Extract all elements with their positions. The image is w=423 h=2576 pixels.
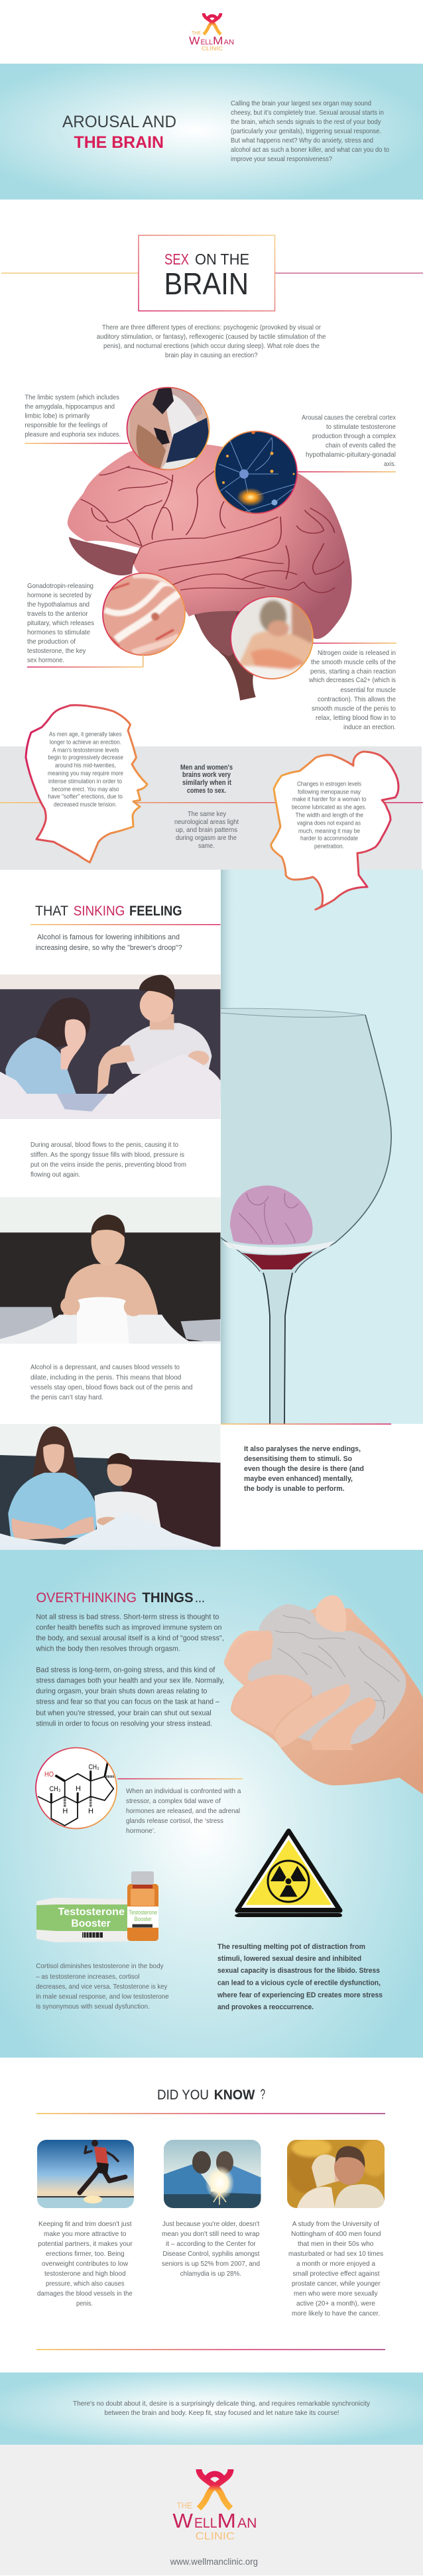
text: limbic system: the amygdala, hippocampus and	[25, 403, 115, 411]
text: three types of erections	[97, 323, 326, 359]
section heading: sex on the brain: SEX	[164, 251, 189, 268]
text: men age: decreased muscle tension.	[54, 801, 117, 809]
text: estrogen: vagina does not expand as	[297, 820, 361, 827]
section heading: sex on the brain: BRAIN	[164, 266, 249, 301]
text: men and women's brains	[180, 764, 233, 795]
text: nottingham study: small protective effect against	[293, 2270, 380, 2278]
text: during arousal: put on the veins inside the penis, preventing blood from	[30, 1161, 186, 1169]
text: same neurological areas: neurological areas light	[174, 818, 239, 826]
text: stressor: When an individual is confronted with a	[126, 1787, 241, 1795]
text: just because: mean you don't still need to wrap	[162, 2230, 260, 2238]
text: men and women's brains: Men and women's	[180, 764, 233, 772]
text: men age: begin to progressively decrease	[48, 754, 123, 762]
logo wordmark: CLINIC	[202, 46, 223, 52]
text: estrogen: much, meaning it may be	[298, 828, 360, 835]
text: gonadotropin: hormone is secreted by	[27, 591, 92, 599]
text: gonadotropin: Gonadotropin-releasing	[27, 582, 93, 590]
bold text: melting pot: The resulting melting pot of distraction from	[217, 1943, 365, 1951]
text: good stress: confer health benefits such as improved immune system on	[36, 1623, 221, 1631]
text: gonadotropin: testosterone, the key	[27, 647, 86, 655]
illustration: testosterone booster box and bottle	[36, 1871, 158, 1942]
text: nottingham study: that men in their 50s who	[298, 2240, 374, 2248]
circle: cortisol molecule: CH₃	[89, 1763, 99, 1771]
bold text: melting pot: can lead to a vicious cycle of erectile dysfunction,	[217, 1979, 381, 1987]
heading: did you know	[36, 2087, 385, 2114]
intro text: Calling the brain your largest sex organ may sound	[231, 99, 371, 107]
text: men age: As men age, it generally takes	[49, 731, 122, 738]
text: estrogen: make it harder for a woman to	[292, 796, 366, 803]
heading: did you know: ?	[261, 2087, 265, 2102]
title	[62, 113, 176, 152]
text: alcohol is a depressant: Alcohol is a depressant, and causes blood vessels to	[30, 1364, 180, 1372]
text: men and women's brains: similarly when it	[182, 779, 231, 787]
text: closing message	[73, 2400, 371, 2417]
illustration: testosterone booster box and bottle: Booster	[135, 1916, 152, 1922]
text: bad stress: during orgasm, your brain shuts down areas relating to	[36, 1687, 207, 1695]
text: stressor: stressor, a complex tidal wave of	[126, 1797, 221, 1805]
text: arousal causes: Arousal causes the cerebral cortex	[302, 414, 396, 422]
website url: www.wellmanclinic.org	[170, 2556, 258, 2567]
text: cortisol diminishes: in male sexual response, and low testosterone	[36, 1993, 169, 2001]
icon: logo mark	[204, 13, 221, 34]
text: bad stress: stimuli in order to focus on resolving your stress instead.	[36, 1720, 212, 1727]
heading: did you know: KNOW	[214, 2087, 255, 2103]
circle photo: neurons	[215, 430, 297, 514]
text: nitrogen oxide: relax, letting blood flow in to	[316, 714, 396, 722]
illustration: hand squeezing brain	[224, 1595, 423, 1794]
circle: cortisol molecule: H	[88, 1808, 93, 1816]
logo wordmark: M	[213, 35, 223, 47]
text: stressor: glands release cortisol, the ‘stress	[126, 1817, 223, 1825]
text: keeping fit: penis.	[76, 2300, 93, 2308]
text: keeping fit: erections firmer, too. Being	[46, 2250, 125, 2258]
text: arousal causes: to stimulate testosterone	[326, 423, 396, 431]
text: good stress: which the body then resolves through orgasm.	[35, 1645, 180, 1653]
heading: overthinking things: THINGS	[142, 1590, 194, 1606]
text: estrogen: Changes in estrogen levels	[297, 781, 361, 788]
heading: overthinking things: ...	[195, 1590, 205, 1606]
bold text: paralyses nerve endings: the body is unable to perform.	[244, 1485, 345, 1493]
title: AROUSAL AND	[62, 113, 176, 131]
cerebellum	[69, 537, 139, 575]
illustration: testosterone booster box and bottle: Testosterone	[58, 1906, 125, 1918]
text: during arousal: stiffen. As the spongy tissue fills with blood, pressure is	[30, 1151, 184, 1159]
text: bad stress	[36, 1666, 224, 1727]
text: keeping fit: overweight contributes to low	[42, 2260, 128, 2268]
text: estrogen: penetration.	[314, 843, 344, 850]
text: cortisol diminishes	[36, 1962, 169, 2011]
heading: that sinking feeling	[30, 904, 220, 925]
text: nitrogen oxide: Nitrogen oxide is released in	[318, 649, 396, 657]
text: men age: around his mid-twenties,	[55, 762, 116, 770]
text: three types of erections: brain play in causing an erection?	[165, 351, 258, 359]
text: men age: meaning you may require more	[48, 770, 123, 778]
text: nitrogen oxide: induce an erection.	[343, 723, 396, 731]
bold text: paralyses nerve endings: It also paralyses the nerve endings,	[244, 1445, 361, 1453]
bold text: melting pot: sexual capacity is disastrous for the libido. Stress	[217, 1967, 380, 1975]
circle photo: tissue	[102, 573, 186, 656]
circle: cortisol molecule: H	[76, 1785, 81, 1793]
footer logo wordmark: W	[172, 2509, 194, 2532]
intro text: But what happens next? Why do anxiety, stress and	[231, 137, 373, 145]
text: nottingham study: men who were more sexually	[294, 2290, 378, 2298]
text: keeping fit: pressure, which also causes	[46, 2280, 125, 2288]
intro text: cheesy, but it’s completely true. Sexual arousal starts in	[231, 109, 384, 117]
section heading: sex on the brain: ON THE	[195, 251, 249, 268]
text: estrogen: become lubricated as she ages.	[292, 804, 366, 811]
text: arousal causes: production through a complex	[312, 432, 396, 440]
text: same neurological areas: same.	[198, 842, 215, 850]
bold text: melting pot: where fear of experiencing ED creates more stress	[217, 1991, 383, 1999]
bold text: paralyses nerve endings: maybe even enhanced) mentally,	[244, 1475, 353, 1483]
text: nottingham study: Nottingham of 400 men found	[291, 2230, 381, 2238]
text: estrogen: harder to accommodate	[300, 835, 358, 843]
logo wordmark: ELL	[200, 38, 213, 46]
logo wordmark	[189, 31, 234, 52]
text: nitrogen oxide	[308, 643, 396, 731]
circle: cortisol molecule: CH₃	[49, 1785, 61, 1793]
title: THE BRAIN	[74, 133, 164, 152]
text: arousal causes: chain of events called the	[326, 441, 396, 449]
text: alcohol intro: increasing desire, so why the "brewer's droop"?	[36, 944, 182, 952]
text: nitrogen oxide: smooth muscle of the penis to	[312, 705, 396, 713]
panel: grey band men and women	[0, 746, 423, 870]
panel: right column glass background	[221, 870, 423, 1424]
text: gonadotropin: the hypothalamus and	[27, 601, 90, 609]
text: limbic system: responsible for the feelings of	[25, 422, 107, 430]
text: nottingham study	[36, 2220, 385, 2350]
text: alcohol intro	[36, 933, 182, 952]
intro text: alcohol act as such a boner killer, and what can you do to	[231, 146, 389, 154]
footer logo wordmark: THE	[176, 2500, 192, 2510]
text: good stress: Not all stress is bad stress. Short-term stress is thought to	[36, 1613, 219, 1621]
text: just because: Disease Control, syphilis amongst	[162, 2250, 259, 2258]
text: men and women's brains: brains work very	[182, 771, 231, 779]
heading: overthinking things	[36, 1590, 205, 1606]
bold text: melting pot: and provokes a reoccurrence.	[217, 2003, 314, 2011]
text: stressor: hormone’.	[126, 1827, 156, 1835]
text: cortisol diminishes: is synonymous with sexual dysfunction.	[36, 2003, 150, 2011]
text: same neurological areas	[174, 810, 239, 850]
text: nottingham study: A study from the University of	[292, 2220, 379, 2228]
footer logo wordmark: AN	[237, 2516, 257, 2531]
text: three types of erections: auditory stimulation, or fantasy), reflexogenic (caused by tactile stimulation of the	[97, 333, 326, 341]
text: nitrogen oxide: contraction). This allows the	[318, 695, 396, 703]
intro text: improve your sexual responsiveness?	[231, 155, 332, 163]
text: nitrogen oxide: the smooth muscle cells of the	[311, 658, 396, 666]
text: just because: chlamydia is up 28%.	[180, 2270, 241, 2278]
text: cortisol diminishes: decreases, and vice versa. Testosterone is key	[36, 1983, 168, 1991]
text: three types of erections: penis), and nocturnal erections (which occur during sleep). What role does the	[103, 342, 320, 350]
text: nottingham study: prostate cancer, while younger	[292, 2280, 381, 2288]
text: during arousal: flowing out again.	[30, 1171, 80, 1179]
logo wordmark: AN	[224, 38, 234, 46]
text: limbic system	[25, 394, 128, 444]
intro text: the brain, which sends signals to the rest of your body	[231, 118, 381, 126]
text: good stress: the body, and sexual arousal itself is a kind of "good stress",	[36, 1634, 224, 1642]
photo: worried man in bed	[0, 1197, 220, 1344]
cerebrum	[68, 444, 352, 639]
text: during arousal: During arousal, blood flows to the penis, causing it to	[30, 1141, 178, 1149]
icon: female head outline	[271, 752, 398, 909]
text: limbic system: pleasure and euphoria sex induces.	[25, 431, 121, 439]
footer logo wordmark: ELL	[194, 2516, 217, 2531]
text: closing message: There's no doubt about it, desire is a surprisingly delicate thing, and requires remarkable synchronicity	[73, 2400, 371, 2408]
text: alcohol is a depressant: vessels stay open, blood flows back out of the penis and	[30, 1383, 193, 1391]
logo wordmark: W	[189, 35, 200, 47]
text: closing message: between the brain and body. Keep fit, stay focused and let nature take its course!	[105, 2409, 339, 2417]
text: just because: seniors is up 52% from 2007, and	[162, 2260, 260, 2268]
panel: overthinking band	[0, 1550, 423, 2058]
text: arousal causes: hypothalamic-pituitary-gonadal	[306, 451, 396, 459]
circle: cortisol molecule	[36, 1747, 243, 1828]
text: stressor	[126, 1787, 241, 1835]
text: limbic system: limbic lobe) is primarily	[25, 412, 90, 420]
text: stressor: hormones are released, and the adrenal	[126, 1807, 240, 1815]
text: nitrogen oxide: penis, starting a chain reaction	[310, 668, 396, 675]
text: estrogen: following menopause may	[298, 789, 361, 796]
text: gonadotropin: pituitary, which releases	[27, 619, 94, 627]
bold text: paralyses nerve endings: even though the desire is there (and	[244, 1465, 364, 1473]
icon: radiation warning triangle	[235, 1831, 342, 1917]
circle: cortisol molecule: HO	[44, 1771, 54, 1779]
footer logo wordmark: M	[217, 2509, 236, 2532]
text: men age	[48, 731, 123, 809]
text: nitrogen oxide: essential for muscle	[341, 686, 396, 694]
bold text: melting pot: stimuli, lowered sexual desire and inhibited	[217, 1955, 361, 1963]
panel: footer	[0, 2445, 423, 2575]
photo: couple looking under the covers	[0, 974, 221, 1119]
intro text: (particularly your genitals), triggering sexual response.	[231, 127, 381, 135]
text: keeping fit: damages the blood vessels in the	[37, 2290, 133, 2298]
heading: overthinking things: OVERTHINKING	[36, 1590, 137, 1606]
text: arousal causes	[298, 414, 396, 472]
illustration: testosterone booster box and bottle: Booster	[71, 1918, 111, 1930]
text: arousal causes: axis.	[384, 460, 396, 468]
text: nitrogen oxide: which decreases Ca2+ (which is	[308, 676, 396, 684]
text: keeping fit: testosterone and high blood	[44, 2270, 126, 2278]
text: three types of erections: There are three different types of erections: psychogenic (provoked by visual or	[102, 323, 321, 331]
bold text: paralyses nerve endings: desensitising them to stimuli. So	[244, 1455, 352, 1463]
text: bad stress: stress and fear so that you can focus on the task at hand –	[36, 1698, 220, 1706]
text: men age: A man's testosterone levels	[52, 747, 119, 754]
text: during arousal	[30, 1141, 186, 1179]
bold text: paralyses nerve endings	[221, 1424, 391, 1493]
text: good stress	[35, 1613, 224, 1653]
heading: that sinking feeling: FEELING	[129, 904, 182, 919]
text: gonadotropin: the production of	[27, 638, 76, 646]
text: limbic system: The limbic system (which includes	[25, 394, 119, 402]
logo: top	[189, 13, 234, 52]
text: just because: Just because you're older, doesn't	[162, 2220, 259, 2228]
text: alcohol is a depressant: the penis can’t stay hard.	[30, 1393, 103, 1401]
text: nottingham study: a month or more enjoyed a	[296, 2260, 375, 2268]
footer logo wordmark	[172, 2500, 257, 2542]
footer logo wordmark: CLINIC	[196, 2531, 235, 2542]
text: bad stress: Bad stress is long-term, on-going stress, and this kind of	[36, 1666, 215, 1674]
illustration: brain	[68, 444, 352, 701]
photo: runner at sunset	[37, 2140, 134, 2208]
intro text	[231, 99, 389, 163]
text: gonadotropin	[27, 582, 143, 668]
text: nottingham study: masturbated or had sex 10 times	[288, 2250, 383, 2258]
logo wordmark: THE	[192, 31, 201, 36]
text: men age: become erect. You may also	[52, 786, 119, 793]
photo: older couple at sunset	[164, 2140, 261, 2208]
text: alcohol intro: Alcohol is famous for lowering inhibitions and	[37, 933, 180, 941]
icon: footer logo mark	[199, 2469, 231, 2508]
text: just because	[162, 2220, 260, 2278]
text: nottingham study: more likely to have the cancer.	[292, 2310, 380, 2317]
text: gonadotropin: travels to the anterior	[27, 610, 88, 618]
icon: small brain in glass	[230, 1185, 313, 1245]
heading: that sinking feeling: THAT	[35, 904, 68, 919]
brain sulci	[81, 466, 344, 593]
brain stem	[194, 608, 280, 701]
heading: that sinking feeling: SINKING	[74, 904, 125, 919]
text: alcohol is a depressant: dilate, including in the penis. This means that blood	[30, 1374, 182, 1381]
circle: cortisol molecule: H	[62, 1808, 68, 1816]
text: bad stress: stress damages both your health and your sex life. Normally,	[36, 1676, 224, 1684]
text: keeping fit: make you more attractive to	[44, 2230, 127, 2238]
heading: did you know: DID YOU	[157, 2087, 209, 2103]
text: men age: have "softer" erections, due to	[48, 793, 123, 801]
photo: annoyed woman and man in bed	[0, 1424, 220, 1550]
bold text: melting pot	[217, 1943, 383, 2011]
text: keeping fit: Keeping fit and trim doesn't just	[38, 2220, 132, 2228]
circle photo: massage	[231, 597, 315, 679]
text: same neurological areas: during orgasm are the	[176, 834, 237, 842]
text: cortisol diminishes: Cortisol diminishes testosterone in the body	[36, 1962, 164, 1970]
section heading: sex on the brain	[1, 235, 423, 311]
text: bad stress: but when you’re stressed, your brain can shut out sexual	[36, 1709, 212, 1717]
panel: closing band	[0, 2372, 423, 2445]
text: estrogen: The width and length of the	[296, 812, 363, 819]
illustration: wine glass	[221, 1008, 391, 1424]
text: men age: intense stimulation in order to	[48, 778, 122, 786]
text: men age: longer to achieve an erection.	[50, 739, 121, 746]
text: same neurological areas: up, and brain patterns	[176, 826, 237, 834]
text: men and women's brains: comes to sex.	[187, 787, 226, 795]
panel: intro band	[0, 64, 423, 200]
text: just because: it – according to the Center for	[166, 2240, 256, 2248]
illustration: testosterone booster box and bottle: Testosterone	[129, 1909, 157, 1916]
text: alcohol is a depressant	[30, 1364, 193, 1401]
text: estrogen	[292, 781, 366, 850]
text: gonadotropin: sex hormone.	[27, 656, 64, 664]
text: cortisol diminishes: – as testosterone increases, cortisol	[36, 1973, 139, 1981]
circle photo: couple lingerie	[126, 387, 211, 472]
text: gonadotropin: hormones to stimulate	[27, 628, 90, 636]
icon: male head outline	[26, 705, 147, 862]
text: same neurological areas: The same key	[188, 810, 227, 818]
photo: older couple kissing	[286, 2138, 389, 2208]
text: keeping fit	[37, 2220, 133, 2308]
text: keeping fit: potential partners, it makes your	[38, 2240, 133, 2248]
text: nottingham study: active (20+ a month), were	[296, 2300, 375, 2308]
